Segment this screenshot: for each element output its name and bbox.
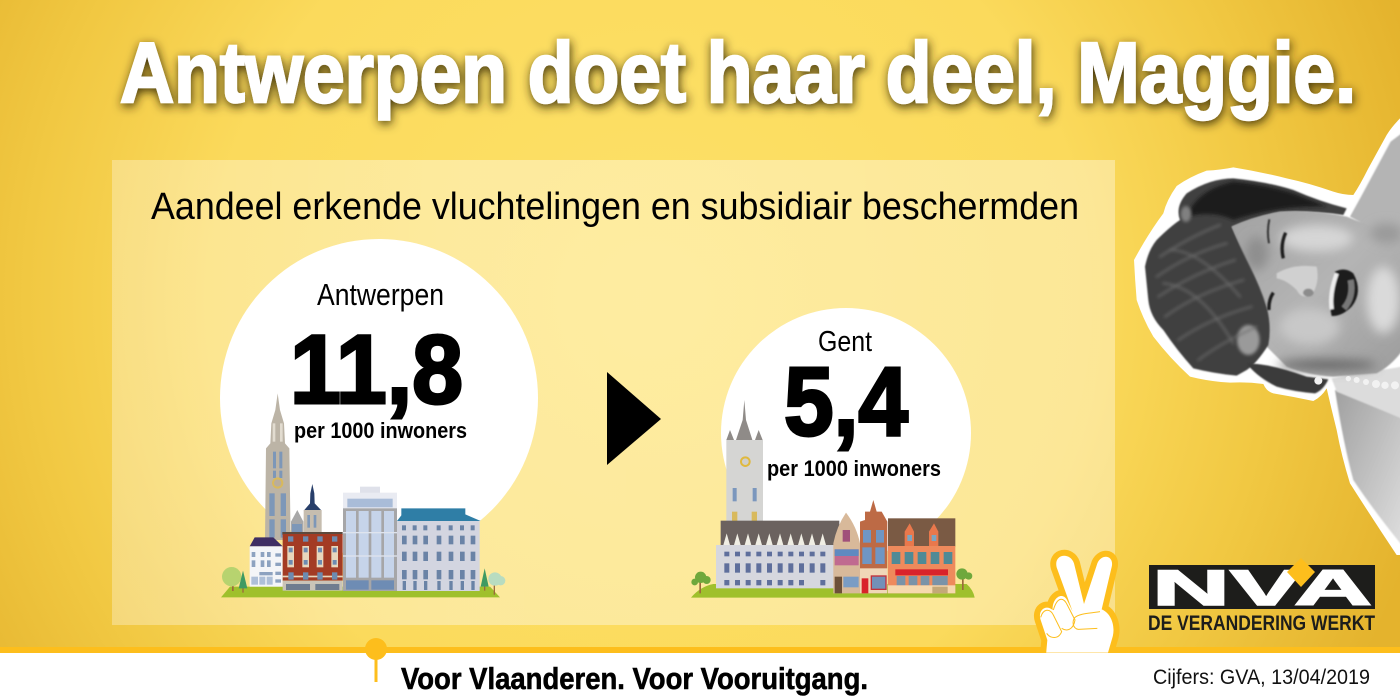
stepped gable house (860, 500, 887, 593)
footer: orange bar (0, 647, 1400, 653)
trees (691, 568, 972, 593)
heading: share of recognised refugees: Aandeel erkende vluchtelingen en subsidiair beschermden (151, 186, 1079, 228)
icon: victory hand (1040, 556, 1114, 655)
trees (222, 567, 505, 595)
blue-roofed building (397, 508, 481, 591)
orange house (888, 518, 955, 593)
circle: Gent (721, 308, 971, 558)
panel: statistics comparison (112, 160, 1115, 625)
circle: Antwerpen (220, 239, 538, 557)
illustration: Antwerp skyline (221, 393, 505, 597)
number: 11,8: 11,8 (290, 315, 463, 424)
unit: per 1000 inwoners, Antwerpen: per 1000 inwoners (294, 418, 467, 443)
cathedral tower (265, 393, 322, 540)
logo: N-VA: NVA (1152, 560, 1372, 616)
unit: per 1000 inwoners, Gent: per 1000 inwoners (767, 456, 941, 481)
earring and pearl necklace (1314, 376, 1399, 389)
brick building (282, 532, 343, 591)
white house (250, 537, 283, 587)
source note: Cijfers: GVA, 13/04/2019 (1153, 666, 1370, 689)
facial features (1268, 219, 1358, 316)
arrow: Antwerpen to Gent (607, 372, 661, 465)
label: Antwerpen: Antwerpen (317, 277, 444, 312)
footer: white strip (0, 653, 1400, 700)
cloth hall (716, 521, 839, 588)
glass office building (343, 487, 397, 591)
illustration: Ghent skyline (691, 400, 975, 598)
belfry (726, 400, 763, 522)
guild house (833, 513, 860, 593)
icon: map pin (365, 638, 387, 682)
label: Gent: Gent (818, 326, 872, 358)
number: 5,4: 5,4 (784, 347, 908, 456)
photo: laughing woman in greyscale (1134, 117, 1400, 555)
slogan: Voor Vlaanderen. Voor Vooruitgang. (401, 661, 868, 696)
logo: N-VA (1148, 558, 1375, 635)
